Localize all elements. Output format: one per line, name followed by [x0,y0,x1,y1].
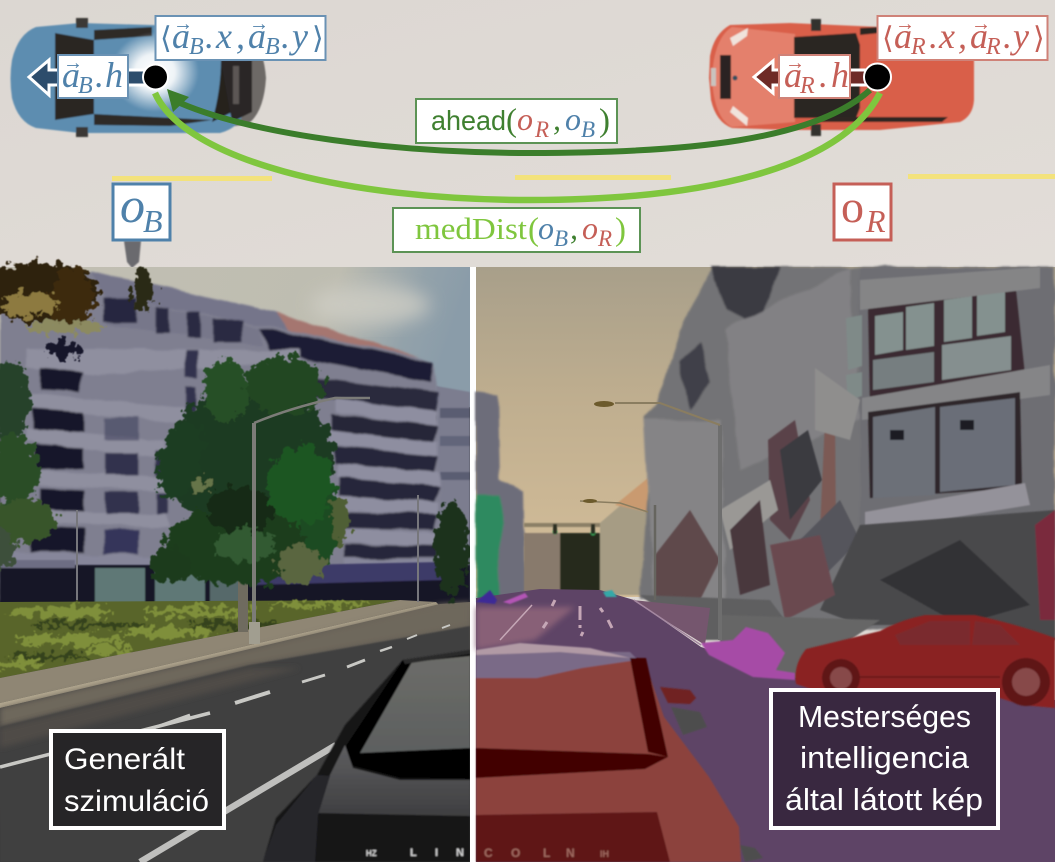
far left building [476,393,526,600]
label: red object [834,181,891,240]
label: red heading [779,52,850,99]
label: ahead predicate: ahead [431,105,506,136]
label: blue position: . [281,16,290,56]
lincoln car: L [410,847,417,859]
balconies right wing [300,375,438,412]
icon: blue car [10,18,266,137]
label: blue position: a [172,16,190,56]
label: blue position: ⟩ [312,22,324,55]
label: red heading: → [785,52,805,74]
label: blue object: o [120,177,145,233]
label: ahead predicate: o [565,101,581,137]
road markings [0,625,450,862]
arrow: medDist relation [155,93,880,200]
lincoln car [263,650,470,862]
label: blue position: → [173,13,193,35]
ego car segmentation [476,643,763,862]
label: blue position [156,13,326,60]
sky [0,267,470,407]
label: ahead predicate [416,99,617,143]
label: red object: R [865,203,886,239]
label: AI view [771,690,998,828]
label: blue heading: . [95,55,104,95]
lincoln car: HZ [366,849,377,858]
arrow: blue heading [29,60,150,95]
label: medDist predicate: medDist [415,211,527,246]
lincoln car: I [435,847,438,859]
label: blue position: B [265,34,280,60]
windows of warped building [655,267,1050,600]
label: blue object [113,177,170,240]
far building [436,386,470,600]
label: red position: x [938,16,955,56]
label: blue position: y [289,16,308,56]
street end [524,478,655,595]
lincoln car: N [456,847,464,859]
sidewalk and road [0,600,470,862]
label: AI view: által látott kép [785,782,983,817]
label: red position: , [958,16,967,56]
panel: generated simulation photo [0,262,470,862]
lower facade shadow [640,510,1055,640]
label: red position: ⟨ [882,22,894,55]
road segmentation [476,589,1055,862]
icon: red anchor dot [864,64,891,90]
label: red position: ⟩ [1033,22,1045,55]
ego car segmentation: N [566,846,575,860]
streetlamp poles [580,401,720,640]
label: blue position: → [249,13,269,35]
label: medDist predicate: ) [615,212,626,248]
label: red heading: a [784,55,802,95]
label: blue heading: → [63,52,83,74]
main apartment building [0,272,442,600]
ego car segmentation: L [543,846,550,860]
panel: AI segmentation view [476,267,1055,862]
warped building [640,267,1055,640]
sidewalk segmentation [476,590,795,680]
label: medDist predicate: R [597,226,612,251]
label: red position: R [985,34,1001,60]
label: red position: y [1010,16,1029,56]
label: red position: . [929,16,938,56]
label: AI view: Mesterséges [798,699,971,734]
ego car segmentation: IH [600,849,609,859]
label: medDist predicate [393,208,640,252]
label: red position: a [894,16,912,56]
label: blue position: x [215,16,232,56]
label: ahead predicate: ( [506,103,517,139]
ego car segmentation: O [511,846,520,860]
label: AI view: intelligencia [800,740,970,775]
label: medDist predicate: , [570,210,578,246]
label: blue position: B [189,34,204,60]
label: red position [878,13,1048,60]
arrow: ahead relation [167,89,870,153]
grass verge [0,600,400,678]
label: ahead predicate: , [553,101,561,137]
arrow: red heading [754,61,875,93]
label: blue position: a [248,16,266,56]
road lane markings [112,174,1055,181]
label: red position: → [971,13,991,35]
divider between photos [470,267,476,862]
icon: red car [709,19,974,136]
label: ahead predicate: B [581,117,595,142]
label: blue heading: B [78,73,93,99]
label: blue heading: h [105,55,123,95]
label: red position: → [895,13,915,35]
ego car segmentation: C [484,846,493,860]
label: generated simulation: szimuláció [64,785,209,818]
street lamp [77,398,418,644]
label: blue position: ⟨ [160,22,172,55]
label: medDist predicate: ( [528,212,539,248]
label: medDist predicate: B [554,226,568,251]
shadow below blue label [124,241,141,268]
label: medDist predicate: o [582,210,598,246]
label: blue position: , [236,16,245,56]
ground gray patch [720,615,880,682]
icon: blue anchor dot [143,64,168,90]
label: red position: . [1003,16,1012,56]
label: red heading: h [831,55,849,95]
sky [476,267,1055,597]
panel: top-down scene [0,0,1055,268]
tree [148,357,348,632]
label: red heading: . [819,55,828,95]
label: blue position: . [205,16,214,56]
label: ahead predicate: ) [599,103,610,139]
ground floor shops [0,560,470,605]
label: blue object: B [143,203,163,239]
label: ahead predicate: o [517,101,533,137]
label: red position: a [970,16,988,56]
label: generated simulation: Generált [64,743,186,776]
label: blue heading: a [62,55,80,95]
red car segmentation [795,615,1055,708]
label: medDist predicate: o [538,210,554,246]
label: generated simulation [51,731,224,828]
far right tree [435,502,469,598]
balconies left wing [25,348,300,375]
label: red object: o [841,181,864,232]
label: blue heading [58,52,128,99]
windows [105,418,139,440]
label: ahead predicate: R [534,117,549,142]
label: red position: R [910,34,926,60]
foreground left tree top [0,262,153,570]
label: red heading: R [799,73,815,99]
